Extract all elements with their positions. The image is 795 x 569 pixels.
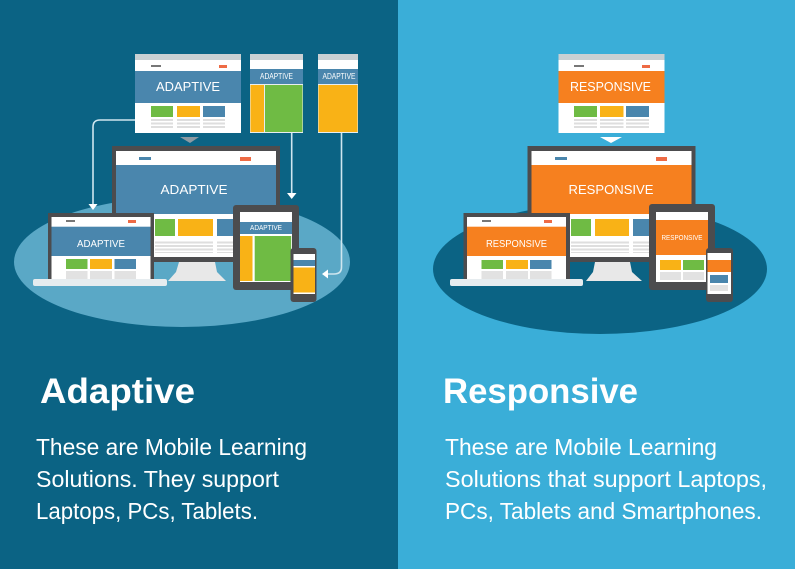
adaptive: down pointer [180,137,199,143]
text block: responsive description: These are Mobile Learning [445,434,717,460]
adaptive: tablet [233,205,299,290]
arrow: window to laptop [88,120,135,210]
heading: Adaptive: Adaptive [40,372,195,411]
text block: responsive description: PCs, Tablets and Smartphones. [445,498,762,524]
adaptive: desktop browser window [135,54,241,133]
text block: adaptive description: Laptops, PCs, Tablets. [36,498,258,524]
responsive: desktop monitor [528,146,696,281]
responsive: browser window [558,54,664,133]
responsive: laptop: RESPONSIVE [486,238,547,250]
adaptive: desktop monitor [112,146,280,281]
text block: adaptive description: These are Mobile Learning [36,434,307,460]
adaptive: tablet: ADAPTIVE [250,225,282,232]
adaptive: desktop monitor: ADAPTIVE [160,182,228,197]
text block: adaptive description [36,434,307,524]
arrow: tablet window to tablet [287,133,296,199]
adaptive ellipse [14,197,350,327]
adaptive: phone browser window [318,54,358,133]
text block: adaptive description: Solutions. They support [36,466,280,492]
panel: responsive background [398,0,795,569]
responsive: tablet: RESPONSIVE [662,235,703,242]
responsive: browser window: RESPONSIVE [570,79,651,94]
text block: responsive description: Solutions that support Laptops, [445,466,767,492]
text block: responsive description [445,434,767,524]
arrow: phone window to phone [322,133,342,278]
responsive: desktop monitor: RESPONSIVE [568,182,654,197]
responsive: down pointer [600,137,622,143]
adaptive: phone [290,248,316,302]
panel: adaptive background [0,0,398,569]
adaptive: desktop browser window: ADAPTIVE [156,79,220,94]
adaptive: laptop: ADAPTIVE [77,238,125,250]
adaptive: laptop [33,213,167,286]
responsive: tablet [649,204,715,290]
adaptive: tablet browser window: ADAPTIVE [260,72,293,81]
adaptive: tablet browser window [250,54,303,133]
heading: Responsive: Responsive [443,372,638,411]
responsive: laptop [450,213,583,286]
responsive ellipse [433,204,767,334]
adaptive: phone browser window: ADAPTIVE [322,72,356,81]
responsive: phone [706,248,733,302]
